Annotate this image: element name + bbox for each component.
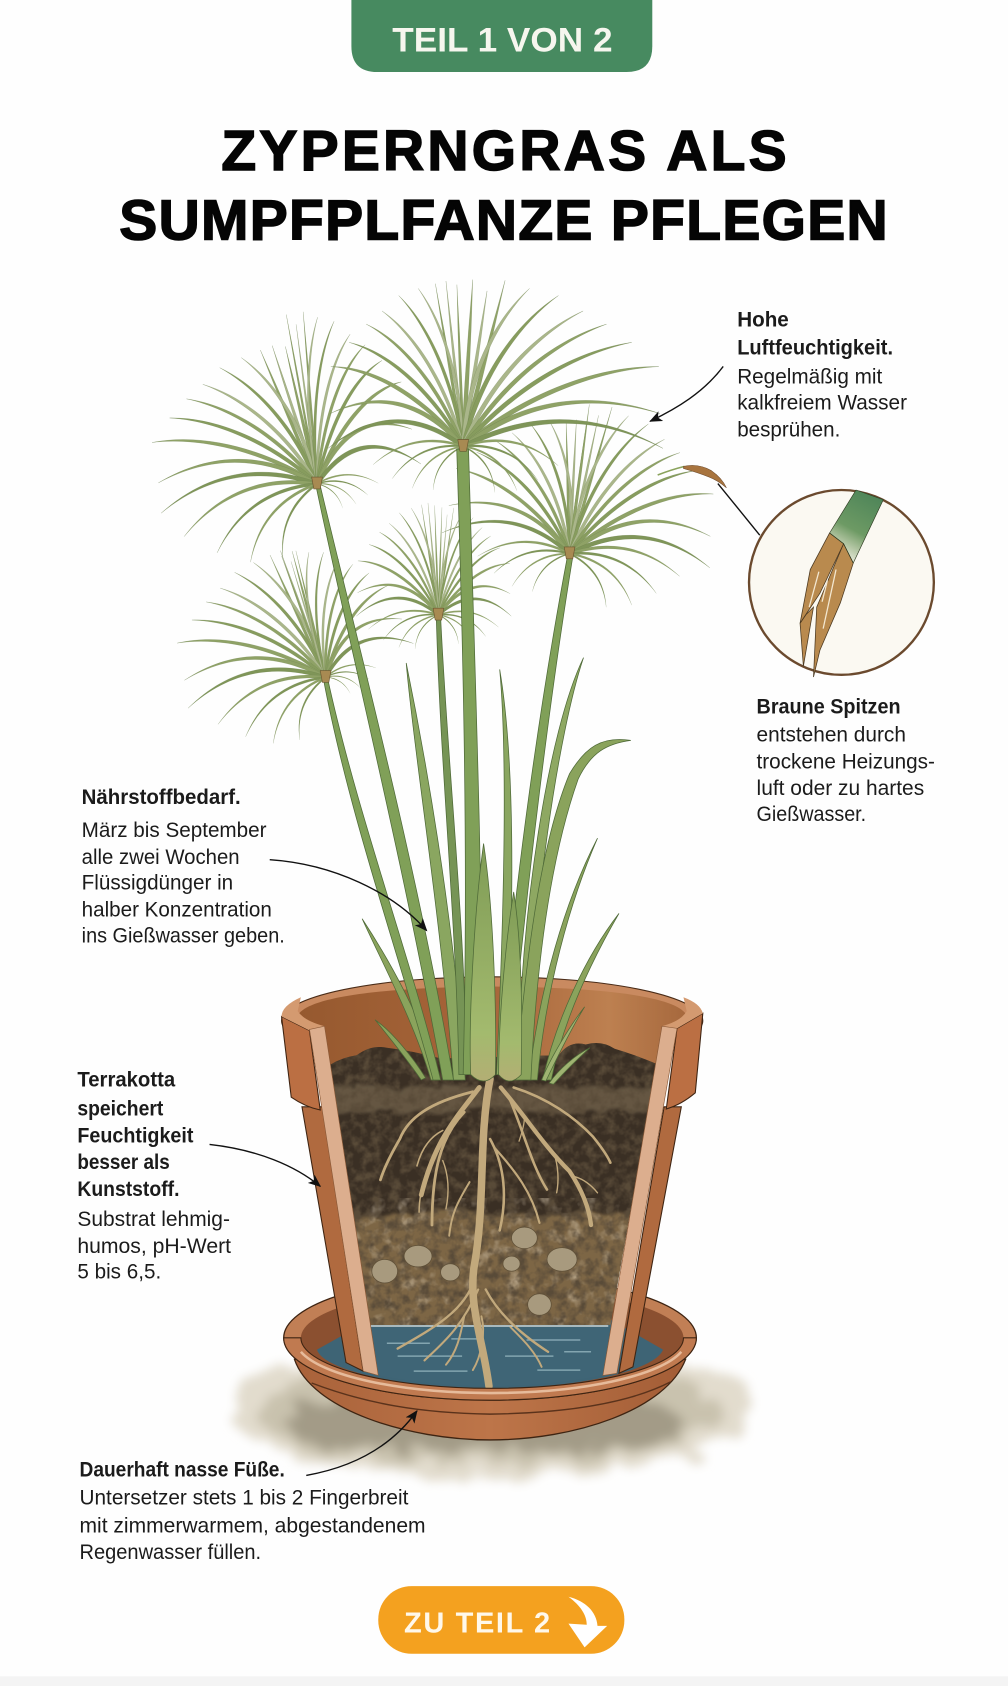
- inset: brown leaf tips: [749, 490, 934, 677]
- button: to part 2: ZU TEIL 2: [404, 1607, 550, 1639]
- title: SUMPFPLFANZE PFLEGEN: [119, 189, 888, 253]
- callout: Terrakotta: besser als: [77, 1151, 170, 1174]
- icon: curved down arrow: [568, 1597, 607, 1647]
- callout: Dauerhaft nasse Füße: Dauerhaft nasse Füße.: [80, 1458, 285, 1481]
- curled leaf: [516, 739, 631, 1080]
- green leaf part: [830, 490, 883, 563]
- callout: Braune Spitzen: Gießwasser.: [757, 803, 866, 826]
- callout: Nährstoffbedarf: Nährstoffbedarf.: [82, 786, 241, 809]
- callout: Nährstoffbedarf: alle zwei Wochen: [82, 846, 240, 869]
- tab: part indicator: [351, 0, 652, 72]
- callout: Dauerhaft nasse Füße: mit zimmerwarmem, abgestandenem: [80, 1514, 426, 1537]
- fan: lower left: [159, 522, 433, 769]
- ground shadow under saucer: [229, 1343, 755, 1476]
- callout: Nährstoffbedarf: [82, 786, 427, 947]
- callout: Terrakotta: humos, pH-Wert: [77, 1235, 231, 1258]
- illustration: stems and leaves: [312, 439, 631, 1084]
- callout: Braune Spitzen: Braune Spitzen: [757, 696, 901, 719]
- callout: Luftfeuchtigkeit: [650, 309, 907, 441]
- connector line to inset: [718, 484, 760, 535]
- callout: Terrakotta: [77, 1068, 320, 1284]
- stem: fan upper left: [316, 486, 453, 1080]
- sheath: left: [470, 844, 496, 1081]
- callout: Luftfeuchtigkeit: Hohe: [737, 309, 789, 332]
- callout: Luftfeuchtigkeit: kalkfreiem Wasser: [737, 391, 907, 414]
- callout: Terrakotta: 5 bis 6,5.: [77, 1261, 161, 1284]
- callout: Nährstoffbedarf: März bis September: [82, 819, 267, 842]
- right wall: [619, 1107, 681, 1373]
- illustration: roots: [380, 1079, 610, 1386]
- illustration: pot back wall and rim: [282, 977, 703, 1069]
- callout: Braune Spitzen: [757, 696, 935, 826]
- fan: upper left: [135, 293, 436, 591]
- stem: fan right: [499, 557, 573, 1075]
- pebbles: [372, 1227, 577, 1315]
- fan: right: [432, 400, 724, 627]
- brown tip on leaf: [658, 465, 726, 488]
- title: ZYPERNGRAS ALS: [221, 119, 787, 183]
- illustration: soil: [330, 1043, 656, 1325]
- callout: Luftfeuchtigkeit: Regelmäßig mit: [737, 366, 882, 389]
- left wall: [302, 1107, 363, 1371]
- stem: fan lower left: [323, 679, 441, 1080]
- callout: Terrakotta: Kunststoff.: [77, 1178, 179, 1201]
- callout: Nährstoffbedarf: halber Konzentration: [82, 899, 272, 922]
- callout: Braune Spitzen: trockene Heizungs-: [757, 750, 935, 773]
- brown tines: [800, 533, 853, 677]
- fan: top centre: [327, 280, 664, 514]
- leaf blades: [362, 919, 438, 1080]
- stem: fan small: [436, 617, 466, 1075]
- button: to part 2: [378, 1586, 624, 1654]
- callout: Terrakotta: Substrat lehmig-: [77, 1208, 230, 1231]
- tab: part indicator: TEIL 1 VON 2: [392, 22, 613, 60]
- callout: Nährstoffbedarf: ins Gießwasser geben.: [82, 924, 285, 947]
- callout: Luftfeuchtigkeit: besprühen.: [737, 418, 840, 441]
- sheath: right: [499, 892, 522, 1081]
- callout: Nährstoffbedarf: Flüssigdünger in: [82, 872, 233, 895]
- callout: Terrakotta: Feuchtigkeit: [77, 1124, 193, 1147]
- callout: Dauerhaft nasse Füße: Untersetzer stets 1 bis 2 Fingerbreit: [80, 1486, 409, 1509]
- illustration: pot walls: [282, 997, 703, 1375]
- calyxes: [312, 439, 575, 682]
- illustration: water in pot: [370, 1325, 610, 1386]
- illustration: plant fans: [135, 280, 724, 769]
- callout: Braune Spitzen: luft oder zu hartes: [757, 777, 924, 800]
- illustration: saucer front lip: [284, 1338, 696, 1414]
- illustration: saucer back: [284, 1276, 696, 1440]
- callout: Terrakotta: Terrakotta: [77, 1068, 176, 1091]
- fan: small middle: [356, 503, 512, 660]
- callout: Braune Spitzen: entstehen durch: [757, 723, 906, 746]
- title: [119, 119, 888, 253]
- callout: Luftfeuchtigkeit: Luftfeuchtigkeit.: [737, 337, 893, 360]
- water in saucer: [317, 1320, 663, 1388]
- callout: Terrakotta: speichert: [77, 1097, 163, 1120]
- callout: Dauerhaft nasse Füße: Regenwasser füllen.: [80, 1541, 261, 1564]
- callout: Dauerhaft nasse Füße: [80, 1411, 426, 1564]
- stem: fan top centre: [457, 449, 483, 1075]
